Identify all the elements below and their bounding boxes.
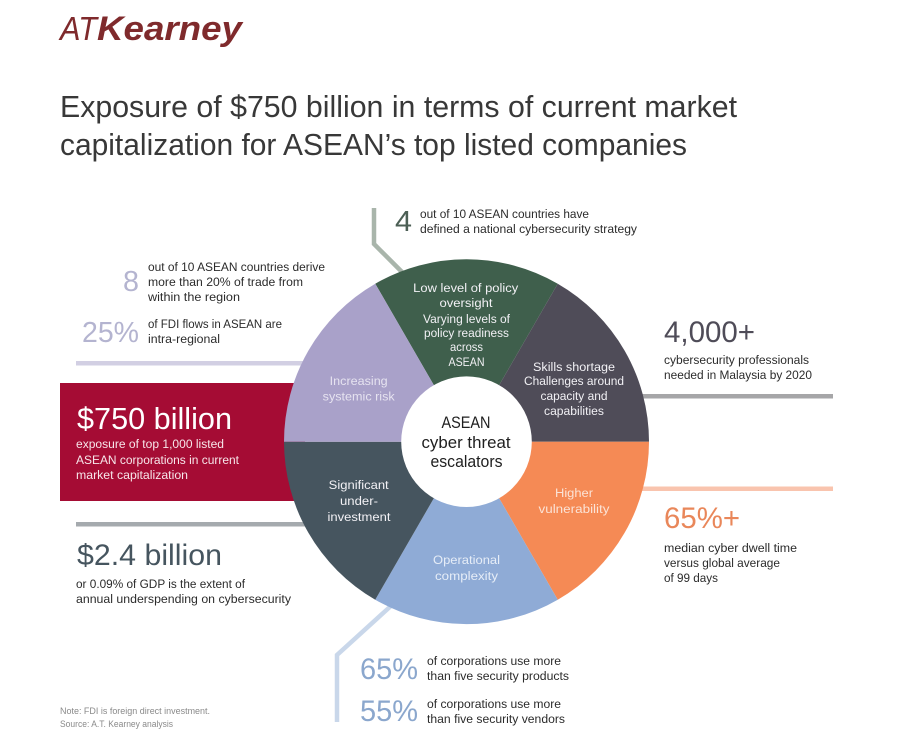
stat: 8 out of 10: within the region (147, 290, 240, 304)
stat: 65%: of corporations use more (427, 654, 561, 668)
segment: skills shortage (466, 284, 649, 442)
stat: 65% (360, 653, 569, 686)
label: vulnerability: vulnerability (538, 502, 610, 516)
label: systemic risk (323, 374, 396, 404)
leader line: complexity (337, 605, 392, 722)
leader line: underinvestment (76, 522, 306, 526)
stat: 4,000+: cybersecurity professionals (664, 353, 809, 367)
center label: ASEAN (442, 414, 490, 432)
stat: 65%+: versus global average (664, 556, 780, 570)
label: complexity (433, 553, 500, 583)
label: policy: oversight (440, 296, 493, 310)
stat: $2.4 billion: annual underspending on cybersecurity (76, 592, 292, 606)
segment: higher vulnerability (466, 442, 649, 600)
label: systemic risk: systemic risk (323, 390, 396, 404)
label: policy: ASEAN (448, 355, 484, 369)
label: policy (413, 281, 519, 369)
center label: escalators (430, 453, 502, 471)
label: policy: Low level of policy (413, 281, 519, 295)
label: underinvestment (328, 478, 391, 524)
segment: low level of policy oversight (375, 259, 558, 442)
stat: 8 out of 10 (123, 260, 325, 304)
segment: operational complexity (375, 442, 558, 624)
stat: 4 out of 10: 4 (395, 206, 412, 238)
panel: $750 billion callout: $750 billion (77, 402, 232, 436)
stat: 55% (360, 695, 565, 728)
segment: significant under-investment (284, 442, 466, 600)
stat: $2.4 billion: or 0.09% of GDP is the extent of (76, 577, 246, 591)
label: systemic risk: Increasing (330, 374, 388, 388)
donut chart: ASEAN cyber threat escalators (284, 259, 649, 624)
title: Exposure of $750 billion in terms of current market (60, 90, 738, 124)
segment: increasing systemic risk (284, 284, 466, 442)
stat: 25%: 25% (82, 317, 139, 349)
label: complexity: complexity (435, 569, 499, 583)
stat: 8 out of 10: more than 20% of trade from (148, 275, 303, 289)
panel: $750 billion callout (60, 383, 305, 501)
stat: 4 out of 10: out of 10 ASEAN countries have (420, 207, 589, 221)
stat: 65%+: median cyber dwell time (664, 541, 797, 555)
stat: 25%: of FDI flows in ASEAN are (148, 317, 282, 331)
title: capitalization for ASEAN’s top listed companies (60, 128, 687, 162)
stat: 55%: 55% (360, 695, 418, 728)
center label (422, 414, 511, 471)
stat: 4 out of 10: defined a national cybersecurity strategy (420, 222, 638, 236)
stat: 4,000+ (664, 316, 812, 382)
label: vulnerability (538, 486, 610, 516)
label: complexity: Operational (433, 553, 500, 567)
label: skills: Challenges around (524, 374, 624, 388)
footnote: Source: A.T. Kearney analysis (60, 719, 173, 729)
stat: 65%: than five security products (427, 669, 569, 683)
center circle (401, 376, 532, 507)
stat: 55%: of corporations use more (427, 697, 561, 711)
leader line: skills shortage (636, 394, 833, 398)
center label: cyber threat (422, 434, 511, 452)
panel: $750 billion callout: ASEAN corporations in current (76, 453, 240, 467)
label: policy: Varying levels of (423, 312, 511, 326)
label: skills: capabilities (544, 404, 604, 418)
stat: 65%: 65% (360, 653, 418, 686)
stat: 65%+: 65%+ (664, 502, 740, 535)
stat: 8 out of 10: 8 (123, 266, 139, 298)
leader line: policy (374, 208, 403, 273)
stat: 65%+ (664, 502, 797, 585)
stat: 4 out of 10 (395, 206, 638, 238)
label: underinvestment: investment (328, 510, 391, 524)
stat: 25%: intra-regional (148, 332, 220, 346)
label: skills: Skills shortage (533, 360, 615, 374)
leader line: systemic risk (76, 361, 306, 366)
panel: $750 billion callout: exposure of top 1,000 listed (76, 437, 224, 451)
stat: 4,000+: 4,000+ (664, 316, 755, 349)
stat: $2.4 billion (76, 539, 292, 606)
leader line: vulnerability (636, 486, 833, 491)
logo: AT Kearney: Kearney (97, 10, 244, 48)
stat: 8 out of 10: out of 10 ASEAN countries derive (148, 260, 325, 274)
label: skills: capacity and (540, 389, 608, 403)
label: skills (524, 360, 624, 418)
footnote: Note: FDI is foreign direct investment. (60, 706, 210, 716)
logo: AT Kearney: AT (58, 10, 100, 47)
stat: 65%+: of 99 days (664, 571, 718, 585)
panel: $750 billion callout: market capitalization (76, 468, 188, 482)
label: underinvestment: Significant (329, 478, 389, 492)
stat: $2.4 billion: $2.4 billion (77, 539, 222, 572)
footnote (60, 706, 210, 729)
label: underinvestment: under- (340, 494, 378, 508)
stat: 55%: than five security vendors (427, 712, 565, 726)
label: policy: policy readiness (424, 326, 509, 340)
stat: 4,000+: needed in Malaysia by 2020 (664, 368, 812, 382)
label: policy: across (450, 340, 483, 354)
label: vulnerability: Higher (555, 486, 593, 500)
stat: 25% (82, 317, 282, 349)
title (60, 90, 738, 162)
